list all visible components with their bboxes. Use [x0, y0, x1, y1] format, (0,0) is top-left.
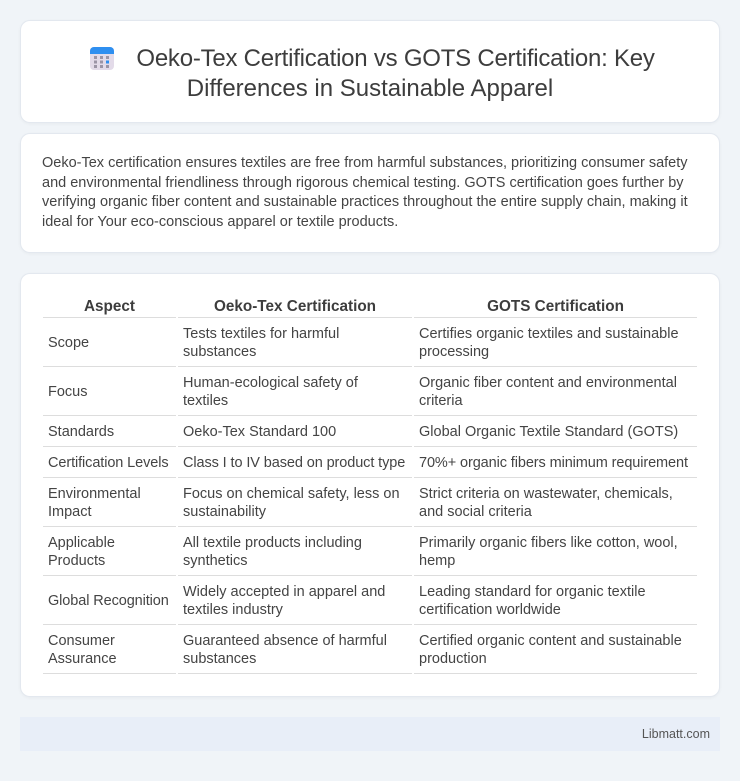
comparison table: 70%+ organic fibers minimum requirement: [419, 455, 688, 471]
comparison table: Environmental: [48, 486, 141, 502]
comparison table: Oeko-Tex Standard 100: [183, 424, 336, 440]
comparison table: Focus on chemical safety, less on: [183, 486, 400, 502]
comparison table: Scope: [48, 335, 89, 351]
comparison table: substances: [183, 651, 256, 667]
comparison table: Certifies organic textiles and sustainable: [419, 326, 679, 342]
introduction text: verifying organic fiber content and sustainable practices throughout the entire supply chain, making it: [42, 194, 688, 210]
footer bar: [20, 717, 720, 751]
comparison table: Guaranteed absence of harmful: [183, 633, 387, 649]
comparison table: hemp: [419, 553, 455, 569]
comparison table: Assurance: [48, 651, 117, 667]
comparison table: [43, 298, 697, 674]
comparison table: Widely accepted in apparel and: [183, 584, 385, 600]
comparison table: and social criteria: [419, 504, 532, 520]
introduction text: [42, 155, 688, 230]
comparison table: textiles: [183, 393, 228, 409]
comparison table: Consumer: [48, 633, 115, 649]
comparison table: Organic fiber content and environmental: [419, 375, 677, 391]
comparison table: Standards: [48, 424, 114, 440]
comparison table: Human-ecological safety of: [183, 375, 358, 391]
comparison table: substances: [183, 344, 256, 360]
comparison table: sustainability: [183, 504, 266, 520]
comparison table: textiles industry: [183, 602, 283, 618]
comparison table: Certification Levels: [48, 455, 168, 471]
panel: introduction card: [20, 133, 720, 253]
comparison table: Class I to IV based on product type: [183, 455, 405, 471]
comparison table: Leading standard for organic textile: [419, 584, 646, 600]
title: [136, 45, 655, 102]
comparison table: Products: [48, 553, 105, 569]
introduction text: and environmental friendliness through rigorous chemical testing. GOTS certification goes further by: [42, 175, 684, 191]
comparison table: production: [419, 651, 487, 667]
comparison table: Aspect: [84, 298, 135, 314]
icon: calendar: [90, 47, 114, 70]
comparison table: certification worldwide: [419, 602, 561, 618]
comparison table: Oeko-Tex Certification: [214, 298, 376, 314]
comparison table: Impact: [48, 504, 92, 520]
comparison table: Strict criteria on wastewater, chemicals,: [419, 486, 673, 502]
introduction text: ideal for Your eco-conscious apparel or textile products.: [42, 214, 398, 230]
comparison table: Global Recognition: [48, 593, 169, 609]
comparison table: Primarily organic fibers like cotton, wool,: [419, 535, 678, 551]
comparison table: synthetics: [183, 553, 247, 569]
title: Oeko-Tex Certification vs GOTS Certification: Key: [136, 45, 655, 72]
panel: title card: [20, 20, 720, 123]
panel: table card: [20, 273, 720, 697]
footer bar: Libmatt.com: [642, 727, 710, 741]
comparison table: processing: [419, 344, 489, 360]
comparison table: Applicable: [48, 535, 115, 551]
title: Differences in Sustainable Apparel: [187, 75, 553, 102]
comparison table: Tests textiles for harmful: [183, 326, 339, 342]
comparison table: Focus: [48, 384, 88, 400]
comparison table: Certified organic content and sustainable: [419, 633, 682, 649]
comparison table: All textile products including: [183, 535, 362, 551]
comparison table: criteria: [419, 393, 463, 409]
introduction text: Oeko-Tex certification ensures textiles are free from harmful substances, prioritizing consumer safety: [42, 155, 688, 171]
comparison table: GOTS Certification: [487, 298, 624, 314]
comparison table: Global Organic Textile Standard (GOTS): [419, 424, 678, 440]
